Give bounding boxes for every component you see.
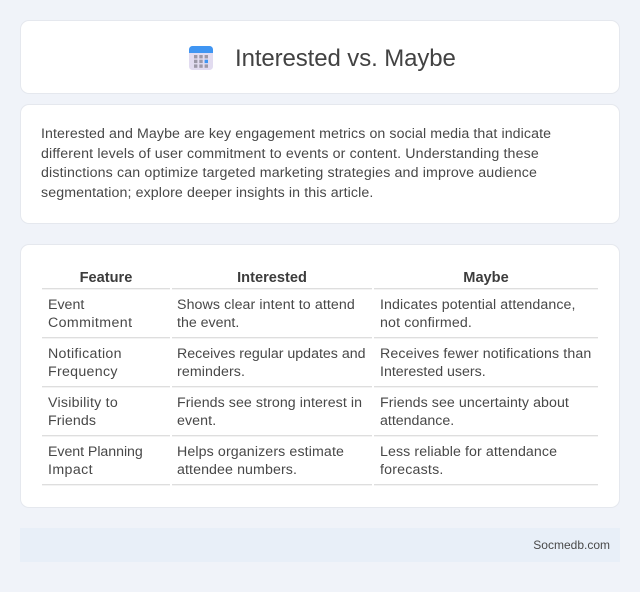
text: attendance. — [380, 413, 454, 429]
text: Receives fewer notifications than — [380, 346, 591, 362]
text: Less reliable for attendance — [380, 444, 557, 460]
row: event commitment — [48, 297, 576, 331]
row: event planning impact — [48, 444, 557, 478]
row: notification frequency — [48, 346, 591, 380]
text: Interested — [237, 270, 307, 286]
table card — [20, 244, 620, 508]
text: Feature — [80, 270, 132, 286]
text: Impact — [48, 462, 93, 478]
header card — [20, 20, 620, 94]
text: Interested and Maybe are key engagement metrics on social media that indicate — [41, 126, 551, 142]
text: not confirmed. — [380, 315, 472, 331]
text: reminders. — [177, 364, 245, 380]
text: Shows clear intent to attend — [177, 297, 355, 313]
footer bar — [20, 528, 620, 562]
text: segmentation; explore deeper insights in this article. — [41, 185, 373, 201]
row: visibility to friends — [48, 395, 569, 429]
text: Interested users. — [380, 364, 486, 380]
title: Interested vs. Maybe — [235, 45, 456, 72]
text: forecasts. — [380, 462, 444, 478]
intro card — [20, 104, 620, 224]
icon: calendar — [189, 46, 213, 70]
text: event. — [177, 413, 216, 429]
text: different levels of user commitment to events or content. Understanding these — [41, 146, 539, 162]
text: Friends see strong interest in — [177, 395, 362, 411]
footer text: Socmedb.com — [533, 538, 610, 552]
intro text — [41, 126, 551, 201]
text: Friends — [48, 413, 96, 429]
text: Indicates potential attendance, — [380, 297, 576, 313]
text: Event Planning — [48, 444, 143, 460]
text: Frequency — [48, 364, 118, 380]
text: Commitment — [48, 315, 132, 331]
table header — [80, 270, 509, 286]
text: distinctions can optimize targeted marketing strategies and improve audience — [41, 165, 537, 181]
text: Helps organizers estimate — [177, 444, 344, 460]
text: Maybe — [463, 270, 509, 286]
text: Friends see uncertainty about — [380, 395, 569, 411]
text: the event. — [177, 315, 239, 331]
text: attendee numbers. — [177, 462, 297, 478]
text: Receives regular updates and — [177, 346, 366, 362]
comparison table — [42, 270, 598, 486]
text: Notification — [48, 346, 122, 362]
text: Event — [48, 297, 84, 313]
text: Visibility to — [48, 395, 118, 411]
